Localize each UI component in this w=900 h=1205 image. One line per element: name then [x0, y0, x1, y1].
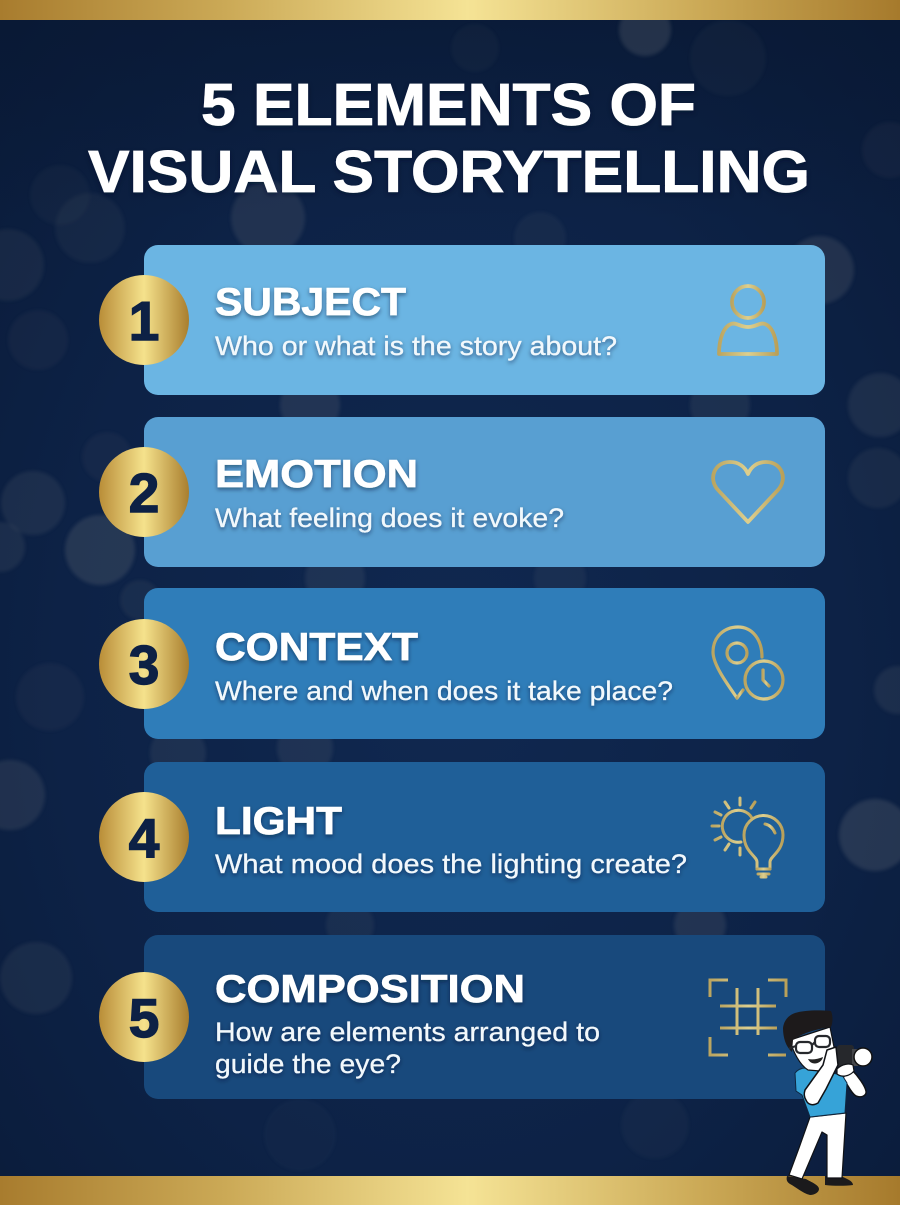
shirt: [795, 1068, 847, 1117]
icon: person: [719, 286, 777, 354]
heading: subject: SUBJECT: [215, 281, 406, 324]
number badge 1: [99, 275, 189, 365]
shoes: [787, 1176, 819, 1195]
heading: light: LIGHT: [215, 800, 342, 843]
number badge 3: [99, 619, 189, 709]
photographer character: [783, 1010, 872, 1195]
near arm: [804, 1047, 838, 1105]
camera: [837, 1045, 872, 1067]
trousers: [789, 1113, 846, 1179]
title: 5 ELEMENTS OF: [201, 72, 696, 138]
number badge 5: [99, 972, 189, 1062]
number badge 5: 5: [129, 987, 159, 1049]
description: light: What mood does the lighting create?: [215, 849, 687, 879]
far arm: [843, 1070, 866, 1097]
heading: composition: COMPOSITION: [215, 968, 525, 1011]
number badge 2: 2: [129, 462, 159, 524]
glasses: [790, 1036, 830, 1053]
title: [88, 72, 810, 205]
heading: emotion: EMOTION: [215, 453, 418, 496]
description: emotion: What feeling does it evoke?: [215, 503, 564, 533]
number badge 4: [99, 792, 189, 882]
icon: heart: [713, 462, 783, 522]
panel: light: [99, 762, 825, 912]
description: context: Where and when does it take place?: [215, 676, 673, 706]
icon: location and clock: [713, 627, 783, 699]
hand on camera: [837, 1064, 854, 1076]
icon: sun and bulb: [712, 798, 783, 877]
number badge 2: [99, 447, 189, 537]
number badge 3: 3: [129, 634, 159, 696]
face: [790, 1027, 834, 1071]
gold bar: top: [0, 0, 900, 20]
hair: [783, 1010, 832, 1052]
panel: emotion: [99, 417, 825, 567]
number badge 1: 1: [129, 290, 159, 352]
panel: subject: [99, 245, 825, 395]
panel: context: [99, 588, 825, 739]
icon: framing grid: [710, 980, 786, 1055]
number badge 4: 4: [129, 807, 160, 869]
panel: composition: [99, 935, 825, 1099]
description: subject: Who or what is the story about?: [215, 331, 617, 361]
description: composition: guide the eye?: [215, 1049, 401, 1079]
gold bar: bottom: [0, 1176, 900, 1205]
heading: context: CONTEXT: [215, 626, 418, 669]
title: VISUAL STORYTELLING: [88, 139, 810, 205]
description: composition: How are elements arranged to: [215, 1017, 600, 1047]
mouth: [808, 1057, 823, 1063]
